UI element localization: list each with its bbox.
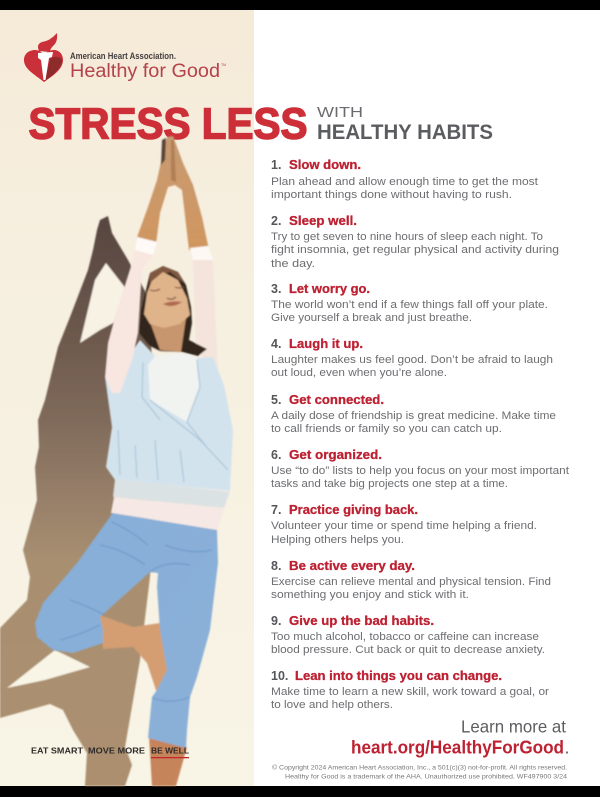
white text panel (254, 10, 600, 786)
photo wall background (0, 10, 254, 786)
habit 4: out loud, even when you’re alone. (271, 367, 447, 379)
logo trademark: TM (221, 63, 226, 67)
copyright: Healthy for Good is a trademark of the AHA. Unauthorized use prohibited. WF497900 3/24 (285, 774, 568, 780)
habit 2 heading: Sleep well. (289, 214, 357, 228)
habit 3 (271, 282, 548, 324)
hair (139, 266, 207, 356)
habit 2 text: Try to get seven to nine hours of sleep each night. To (271, 231, 543, 243)
habit 1: important things done without having to rush. (271, 189, 512, 201)
habit 1: 1. (271, 158, 281, 172)
copyright (272, 764, 568, 780)
habit 6 text: Use “to do” lists to help you focus on your most important (271, 465, 570, 477)
habit 5 (271, 393, 556, 435)
left sleeve (105, 237, 157, 393)
habit 3 text: The world won’t end if a few things fall off your plate. (271, 299, 548, 311)
call to action (351, 716, 570, 758)
habit 7 (271, 503, 537, 546)
habit 2: fight insomnia, get regular physical and activity during (271, 244, 559, 256)
icon: heart and torch (24, 33, 63, 82)
habit 8: something you enjoy and stick with it. (271, 589, 469, 601)
raised arms and hands (136, 136, 209, 250)
habit 10 heading: Lean into things you can change. (295, 669, 502, 683)
habit 10: to love and help others. (271, 699, 393, 711)
wall shadow of the woman (0, 216, 155, 786)
habit 8 heading: Be active every day. (289, 559, 415, 573)
habit 5: to call friends or family so you can catch up. (271, 423, 502, 435)
habit 1 (271, 158, 539, 201)
habit 6: 6. (271, 448, 281, 462)
copyright: © Copyright 2024 American Heart Association, Inc., a 501(c)(3) not-for-profit. All rights reserved. (272, 764, 567, 772)
habit 6 (271, 448, 570, 490)
shirt hem (111, 497, 224, 530)
neck (150, 318, 186, 352)
habit 2 (271, 214, 559, 270)
habit 10 (271, 669, 549, 711)
tagline: eat smart move more be well: BE WELL (151, 746, 189, 756)
habit 3: Give yourself a break and just breathe. (271, 312, 472, 324)
logo text: american heart association: American Heart Association. (70, 51, 176, 61)
habit 2: the day. (271, 258, 315, 270)
habit 7 text: Volunteer your time or spend time helping a friend. (271, 520, 537, 532)
logo (24, 33, 226, 82)
habit 3 heading: Let worry go. (289, 282, 370, 296)
habit 9: blood pressure. Cut back or quit to decrease anxiety. (271, 644, 545, 656)
title (28, 100, 493, 148)
habit 4 text: Laughter makes us feel good. Don’t be afraid to laugh (271, 354, 553, 366)
habit 9: 9. (271, 614, 281, 628)
tagline: eat smart move more be well: EAT SMART (31, 746, 84, 756)
facial features (150, 287, 184, 306)
habit 5 text: A daily dose of friendship is great medicine. Make time (271, 410, 556, 422)
habit 6: tasks and take big projects one step at a time. (271, 478, 508, 490)
habit 4: 4. (271, 337, 281, 351)
habit 2: 2. (271, 214, 281, 228)
habit 3: 3. (271, 282, 281, 296)
habit 7: Helping others helps you. (271, 534, 404, 546)
habit 10: 10. (271, 669, 288, 683)
habit 6 heading: Get organized. (289, 448, 382, 462)
habit 5 heading: Get connected. (289, 393, 384, 407)
blue pants (35, 513, 218, 748)
habit 10 text: Make time to learn a new skill, work toward a goal, or (271, 686, 549, 698)
vest waistband (113, 479, 230, 508)
white shirt (148, 353, 200, 422)
habit 8 text: Exercise can relieve mental and physical tension. Find (271, 576, 551, 588)
light blue vest (105, 340, 233, 491)
learn more text: Learn more at (461, 716, 566, 736)
vest folds (118, 360, 228, 482)
tagline: eat smart move more be well: MOVE MORE (88, 746, 145, 756)
right sleeve (190, 246, 218, 368)
title: healthy habits: HEALTHY HABITS (317, 120, 493, 144)
habit 4 (271, 337, 553, 379)
title: with: WITH (317, 104, 363, 121)
habit 9 heading: Give up the bad habits. (289, 614, 434, 628)
tagline: eat smart move more be well (31, 746, 189, 758)
habit 4 heading: Laugh it up. (289, 337, 363, 351)
habit 1 text: Plan ahead and allow enough time to get the most (271, 176, 539, 188)
website link: heart.org/HealthyForGood (351, 738, 564, 758)
habit 8: 8. (271, 559, 281, 573)
habit 9 (271, 614, 545, 656)
pants folds (60, 522, 212, 701)
logo text: healthy for good: Healthy for Good (70, 61, 220, 82)
habit 5: 5. (271, 393, 281, 407)
photo: woman in tree pose (35, 136, 233, 786)
habit 1 heading: Slow down. (289, 158, 361, 172)
face (144, 272, 190, 328)
habit 8 (271, 559, 551, 601)
habit 7 heading: Practice giving back. (289, 503, 418, 517)
habit 9 text: Too much alcohol, tobacco or caffeine can increase (271, 631, 539, 643)
link period: . (564, 738, 570, 758)
habit 7: 7. (271, 503, 281, 517)
lower standing leg (149, 736, 187, 786)
title: stress less: STRESS LESS (28, 100, 308, 148)
foot (100, 615, 179, 698)
